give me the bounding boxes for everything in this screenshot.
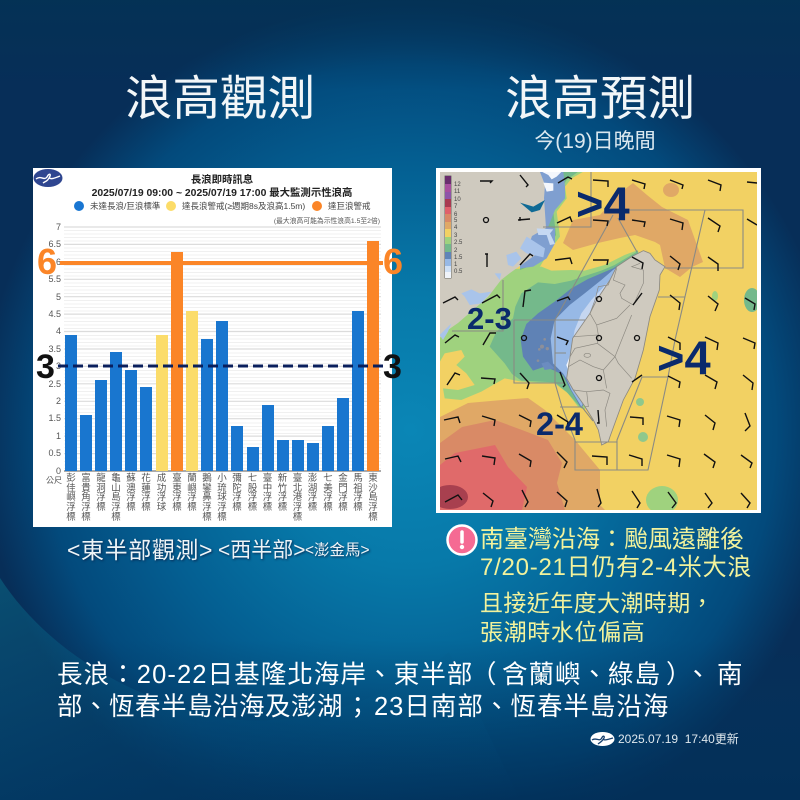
- station labels: 彭佳嶼浮標: [66, 473, 76, 523]
- y axis labels: 4: [56, 326, 61, 336]
- title: wave forecast: 浪高預測: [505, 73, 695, 126]
- station labels: 金門浮標: [338, 473, 348, 513]
- swell forecast text: 部、恆春半島沿海及澎湖: [57, 693, 343, 721]
- chart title: [92, 174, 352, 199]
- station labels: 蘇澳浮標: [126, 473, 136, 513]
- chart caption: <東半部觀測>: [67, 537, 213, 563]
- station labels: 七股浮標: [248, 473, 257, 513]
- y axis labels: 5: [56, 292, 61, 302]
- y axis labels: 7: [56, 222, 61, 232]
- y axis labels: 1: [56, 431, 61, 441]
- callout: south Taiwan warning: 張潮時水位偏高: [480, 619, 645, 645]
- station labels: 彌陀浮標: [232, 473, 242, 513]
- chart title: 長浪即時訊息: [191, 175, 253, 186]
- map legend: 7: [454, 204, 458, 210]
- station labels: 東沙島浮標: [368, 473, 378, 523]
- station labels: 七美浮標: [323, 473, 333, 513]
- map legend: 2: [454, 248, 458, 254]
- map legend: 12: [454, 182, 461, 188]
- map legend: 0.5: [454, 269, 463, 275]
- forecast zone outlines: [452, 172, 743, 470]
- chart note: (最大浪高可能為示性浪高1.5至2倍): [274, 218, 380, 225]
- threshold label: 3 left: 3: [36, 348, 55, 386]
- map legend: 5: [454, 218, 458, 224]
- chart legend: 未達長浪/巨浪標準: [90, 201, 160, 211]
- map legend: 1: [454, 262, 458, 268]
- station labels: [66, 472, 378, 523]
- chart title: 2025/07/19 09:00 ~ 2025/07/19 17:00 最大監測示性浪高: [92, 188, 352, 199]
- map legend: [445, 176, 463, 278]
- y axis labels: 2: [56, 396, 61, 406]
- station circles: [484, 218, 640, 380]
- title: wave observation: 浪高觀測: [125, 73, 315, 126]
- swell forecast text: 、: [685, 661, 711, 689]
- Taiwan strait sea layers: [438, 250, 641, 410]
- station labels: 臺東浮標: [172, 473, 182, 513]
- chart grid: [64, 226, 381, 472]
- county borders: [568, 263, 643, 427]
- text: 達巨浪警戒: [328, 201, 371, 211]
- north coast sea strip: [520, 172, 583, 272]
- swell forecast text: 23日南部、恆春半島沿海: [374, 693, 669, 721]
- threshold label: 6 left: 6: [37, 241, 57, 282]
- map legend: 11: [454, 189, 461, 195]
- station labels: 龜山島浮標: [111, 473, 121, 523]
- map legend: 4: [454, 225, 458, 231]
- swell forecast text: 長浪：20-22日基隆北海岸、東半部: [57, 661, 474, 689]
- y axis labels: 1.5: [48, 413, 61, 423]
- station labels: 新竹浮標: [278, 473, 287, 513]
- logo: agency emblem: [34, 169, 62, 187]
- swell forecast text: ；: [345, 693, 371, 721]
- swell forecast text: 南: [717, 661, 743, 689]
- station labels: 蘭嶼浮標: [187, 473, 197, 513]
- Taiwan island: [567, 251, 665, 445]
- station labels: 小琉球浮標: [217, 473, 227, 523]
- station labels: 臺中浮標: [263, 473, 272, 513]
- map legend: 1.5: [454, 255, 463, 261]
- callout: south Taiwan warning: [480, 526, 752, 645]
- threshold line: 6 m: [60, 261, 383, 265]
- chart caption: [67, 537, 371, 563]
- y axis labels: 3: [56, 361, 61, 371]
- map legend: 6: [454, 212, 458, 218]
- map label: over 4 east: >4: [657, 331, 711, 384]
- y axis labels: 5.5: [48, 274, 61, 284]
- subtitle: tonight: 今(19)日晚間: [534, 130, 656, 153]
- map label: 2-4: 2-4: [536, 406, 583, 442]
- orange sea zones: [440, 183, 703, 510]
- station labels: 花蓮浮標: [141, 473, 151, 513]
- station labels: 鵝鑾鼻浮標: [202, 473, 212, 523]
- station labels: 馬祖浮標: [353, 473, 363, 513]
- station labels: 澎湖浮標: [308, 473, 317, 513]
- map legend: 2.5: [454, 240, 463, 246]
- threshold label: 6 right: 6: [383, 241, 403, 282]
- panel: wave height forecast map: [436, 168, 761, 513]
- logo: footer emblem: [590, 732, 614, 746]
- map legend: 10: [454, 197, 461, 203]
- callout: south Taiwan warning: 且接近年度大潮時期，: [480, 590, 714, 616]
- coast islands: [520, 172, 562, 257]
- station labels: 臺北港浮標: [293, 473, 302, 523]
- swell forecast text: （: [471, 661, 497, 689]
- panel: bar chart of observed wave height: [33, 168, 392, 527]
- station labels: 龍洞浮標: [96, 473, 106, 513]
- y axis labels: 0: [56, 466, 61, 476]
- map legend: 3: [454, 233, 458, 239]
- unit label: 公尺: [46, 476, 62, 485]
- update timestamp: 2025.07.19 17:40更新: [618, 732, 739, 746]
- y axis labels: 4.5: [48, 309, 61, 319]
- icon: alert: [446, 524, 478, 556]
- swell forecast text: 含蘭嶼、綠島: [502, 661, 661, 689]
- threshold label: 3 right: 3: [383, 348, 402, 386]
- y axis labels: [48, 222, 61, 476]
- map label: over 4 north: >4: [576, 177, 630, 230]
- callout: south Taiwan warning: 7/20-21日仍有2-4米大浪: [480, 554, 752, 581]
- chart caption: <澎金馬>: [305, 542, 370, 559]
- swell forecast text: [57, 661, 743, 721]
- wind barbs: [443, 175, 757, 508]
- China coast: [438, 172, 546, 340]
- chart caption: <西半部>: [218, 539, 306, 562]
- callout: south Taiwan warning: 南臺灣沿海：颱風遠離後: [480, 526, 744, 553]
- y axis labels: 3.5: [48, 344, 61, 354]
- y axis labels: 6: [56, 257, 61, 267]
- chart legend: [74, 201, 371, 211]
- y axis labels: 6.5: [48, 239, 61, 249]
- y axis labels: 2.5: [48, 379, 61, 389]
- chart legend: 達長浪警戒(≥週期8s及浪高1.5m): [182, 201, 305, 211]
- y axis labels: 0.5: [48, 448, 61, 458]
- swell forecast text: ）: [666, 661, 692, 689]
- station labels: 富貴角浮標: [81, 473, 91, 523]
- station labels: 成功浮球: [157, 473, 166, 513]
- map label: 2-3: 2-3: [467, 301, 512, 336]
- threshold line: 3 m: [58, 364, 383, 368]
